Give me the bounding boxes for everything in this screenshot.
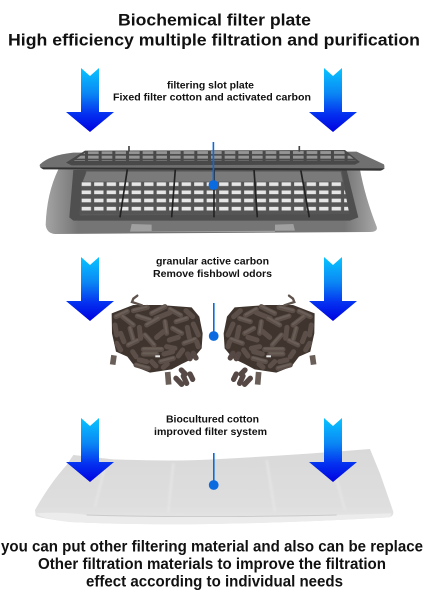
bottom text block bbox=[1, 539, 423, 591]
label: granular active carbon: granular active carbon bbox=[156, 257, 269, 268]
plate body bbox=[46, 169, 377, 234]
dividers bbox=[120, 169, 309, 217]
front clips bbox=[130, 224, 295, 232]
left carbon pile bbox=[112, 296, 203, 385]
label: biocultured cotton: Biocultured cotton bbox=[166, 415, 259, 426]
icon: arrow middle left bbox=[66, 257, 114, 321]
label: granular active carbon: Remove fishbowl odors bbox=[153, 269, 272, 280]
image: filter slot plate bbox=[40, 146, 385, 234]
label: biocultured cotton bbox=[154, 415, 267, 438]
icon: arrow bottom left bbox=[66, 418, 114, 482]
title bbox=[8, 11, 420, 50]
icon: arrow top left bbox=[66, 68, 114, 132]
icon: arrow bottom right bbox=[309, 418, 357, 482]
pin: cotton marker bbox=[209, 453, 219, 490]
title: Biochemical filter plate bbox=[118, 11, 311, 30]
pin: carbon marker bbox=[209, 303, 219, 341]
icon: arrow middle right bbox=[309, 257, 357, 321]
label: filtering slot plate bbox=[113, 80, 311, 104]
label: filtering slot plate: filtering slot plate bbox=[167, 80, 254, 91]
bottom text block: Other filtration materials to improve the filtration bbox=[38, 556, 386, 573]
top grid bbox=[66, 150, 360, 165]
bottom text block: effect according to individual needs bbox=[86, 574, 343, 591]
icon: arrow top right bbox=[309, 68, 357, 132]
filter window bbox=[80, 171, 349, 215]
lower rim bbox=[69, 170, 358, 221]
label: biocultured cotton: improved filter system bbox=[154, 427, 267, 438]
top flange bbox=[40, 152, 384, 171]
label: granular active carbon bbox=[153, 257, 272, 280]
pin: plate marker bbox=[209, 142, 218, 190]
right carbon pile bbox=[224, 296, 315, 385]
image: biocultured cotton pad bbox=[35, 449, 393, 524]
title: High efficiency multiple filtration and purification bbox=[8, 31, 420, 50]
label: filtering slot plate: Fixed filter cotton and activated carbon bbox=[113, 93, 311, 104]
image: granular active carbon piles bbox=[112, 296, 315, 385]
